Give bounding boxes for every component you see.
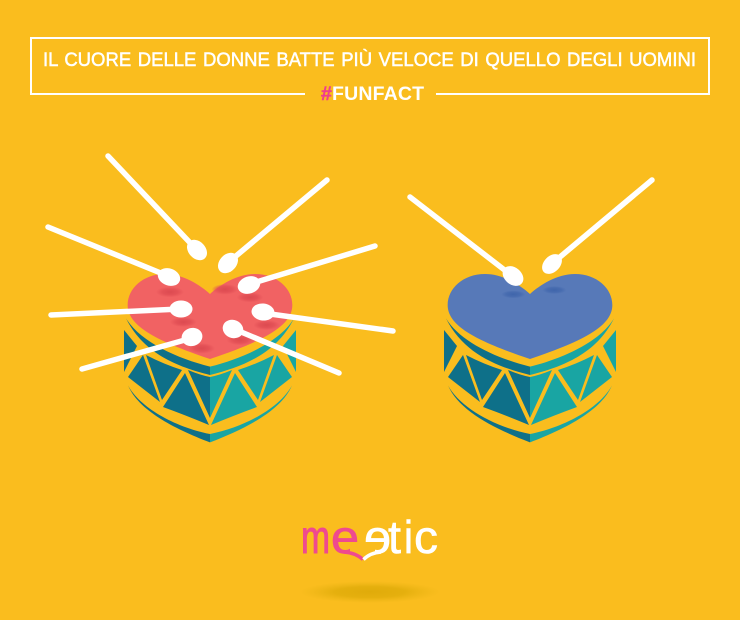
- logo heart tail: [344, 552, 363, 560]
- hashtag: #FUNFACT: [321, 83, 424, 105]
- stick 8: [220, 317, 339, 373]
- drumsticks: blue heart: [410, 180, 652, 290]
- logo shadow: [300, 581, 440, 603]
- drum: blue heart: [444, 274, 616, 442]
- drum body left: [444, 318, 530, 442]
- logo: meetic: [300, 511, 440, 603]
- stick 7: [82, 326, 204, 369]
- logo mirrored e: e: [364, 511, 391, 563]
- stick 1: [108, 156, 211, 264]
- stick 5: [51, 300, 192, 318]
- logo m: m: [301, 511, 330, 563]
- drum: red heart: [124, 274, 296, 442]
- logo c: c: [414, 511, 438, 563]
- drum body left: [124, 318, 210, 442]
- red heart: [128, 274, 292, 359]
- hit shadows: [156, 284, 280, 354]
- stick right: [538, 180, 652, 278]
- drum body right: [210, 318, 296, 442]
- stick left: [410, 197, 527, 290]
- title frame: [31, 38, 709, 94]
- drum body right: [530, 318, 616, 442]
- drumsticks: red heart: [48, 156, 393, 373]
- logo pink e: e: [331, 511, 359, 563]
- logo t: t: [388, 511, 401, 563]
- blue heart: [448, 274, 612, 359]
- logo e terminal masks: [350, 543, 375, 553]
- logo i: i: [404, 511, 413, 563]
- stick 3: [48, 227, 183, 289]
- stick 2: [214, 180, 327, 277]
- stick 4: [235, 246, 375, 297]
- title: IL CUORE DELLE DONNE BATTE PIÙ VELOCE DI QUELLO DEGLI UOMINI: [43, 48, 696, 71]
- stick 6: [251, 302, 393, 331]
- hit shadows: [501, 286, 566, 298]
